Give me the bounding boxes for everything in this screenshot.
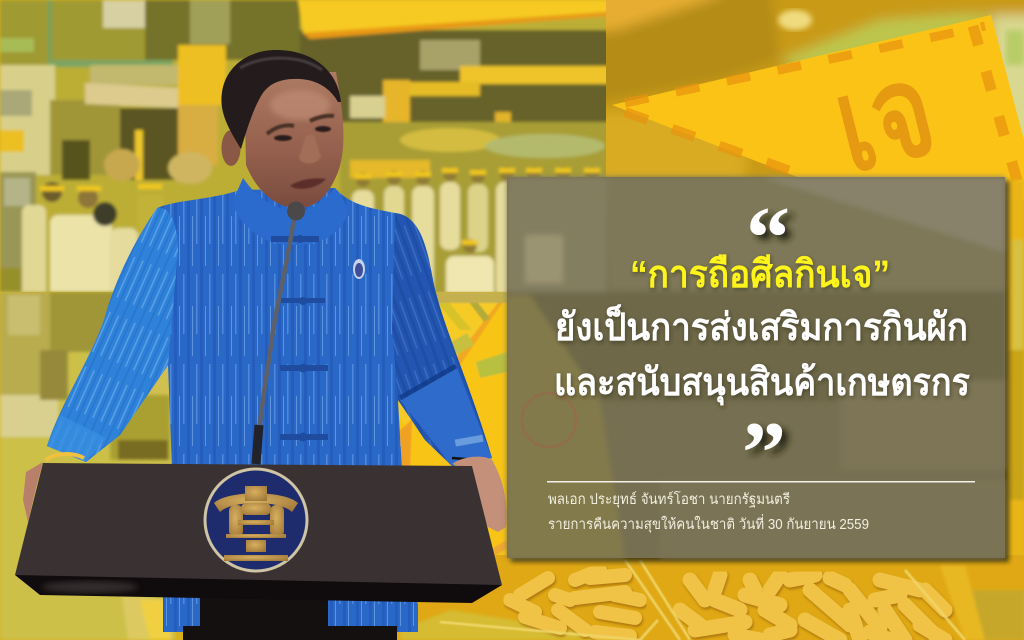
jacket hem and trousers [163, 590, 418, 640]
quote line two: และสนับสนุนสินค้าเกษตรกร [554, 362, 971, 406]
crowd left [22, 182, 164, 300]
photo: street parade top left [0, 0, 620, 300]
right edge strip [1005, 180, 1024, 580]
quote line one: ยังเป็นการส่งเสริมการกินผัก [555, 304, 968, 349]
rolls right tray [680, 575, 945, 640]
quote panel [507, 177, 1009, 562]
right cuff [400, 366, 492, 466]
head [221, 50, 343, 208]
attribution: พลเอก ประยุทธ์ จันทร์โอชา นายกรัฐมนตรี [548, 490, 790, 508]
face highlight [270, 90, 330, 120]
opening quote mark: “ [746, 190, 790, 287]
left hand [23, 462, 43, 522]
yellow wristband [46, 454, 84, 460]
left cuff band [47, 415, 106, 462]
hair [221, 50, 341, 149]
flag letter: เจ [820, 34, 949, 200]
lapel pin [353, 259, 365, 279]
buttons [271, 235, 328, 442]
right sleeve [392, 213, 492, 466]
flag [612, 15, 1024, 200]
mouth [290, 178, 326, 189]
photo: yellow food packaging centre [385, 292, 508, 628]
crowd right [352, 167, 610, 300]
attribution [548, 490, 869, 533]
collar [232, 178, 347, 245]
brows and eyes [267, 116, 334, 141]
microphone [256, 202, 305, 464]
jacket body [47, 188, 492, 470]
photo: spring rolls tray [395, 555, 1024, 640]
nose [299, 135, 321, 164]
attribution: รายการคืนความสุขให้คนในชาติ วันที่ 30 กันยายน 2559 [548, 514, 869, 533]
rolls left tray [510, 570, 640, 636]
hair highlight [240, 58, 322, 70]
panel photo showing through [507, 177, 1005, 558]
photo: street procession bottom left [0, 292, 175, 640]
podium [15, 463, 502, 603]
face [244, 72, 343, 208]
right hand [452, 457, 507, 532]
ear [222, 130, 240, 166]
divider [547, 481, 975, 482]
left sleeve [47, 208, 178, 462]
speaker [23, 50, 507, 640]
yellow heading: “การถือศีลกินเจ” [630, 254, 890, 296]
closing quote mark: ” [742, 405, 786, 502]
photo: noodle bowl and flag top right [606, 0, 1024, 200]
government seal [204, 468, 308, 572]
